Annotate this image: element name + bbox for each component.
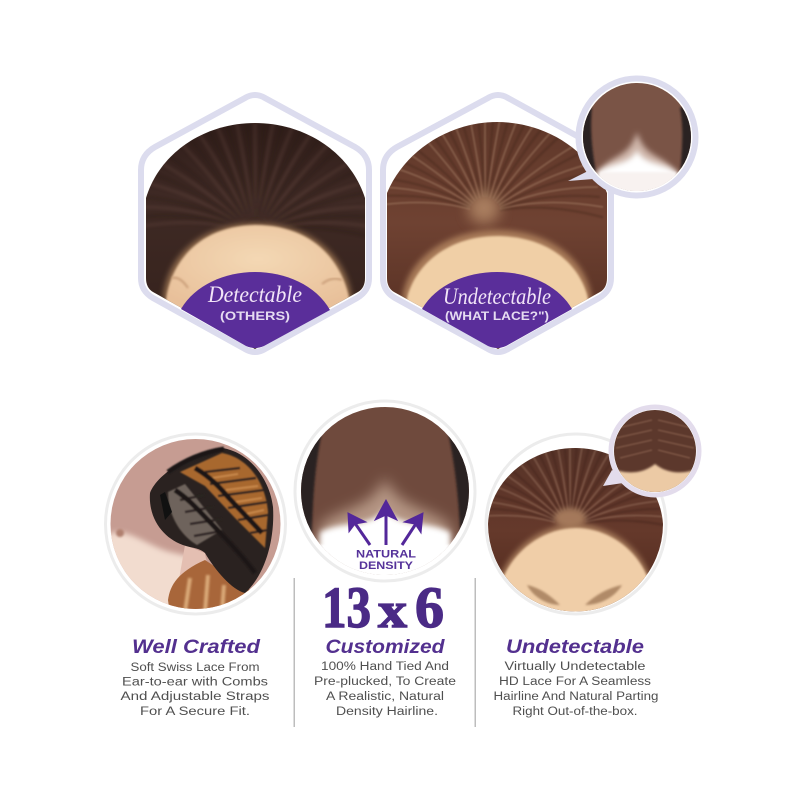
photo: dark hair with visible hairline <box>146 123 365 349</box>
badge: undetectable <box>422 272 572 348</box>
badge: detectable <box>181 272 330 348</box>
callout inset: natural parting close-up <box>603 407 700 495</box>
body text: well crafted: Ear-to-ear with Combs <box>122 676 268 688</box>
label: natural density <box>356 548 416 572</box>
body text: customized <box>314 661 456 718</box>
body text: undetectable <box>494 661 658 718</box>
big number: 13 x 6: 6 <box>415 575 444 640</box>
panel: 13 x 6 customized <box>295 401 475 718</box>
body text: undetectable: Virtually Undetectable <box>504 661 646 673</box>
body text: well crafted: For A Secure Fit. <box>140 706 250 718</box>
heading: well crafted: Well Crafted <box>132 637 260 658</box>
photo circle: lace cap construction <box>105 434 290 620</box>
badge sub label: (OTHERS) <box>220 309 290 323</box>
big number: 13 x 6: 13 <box>322 575 371 640</box>
icon: density arrows <box>348 500 423 545</box>
hexagon frame <box>141 95 369 352</box>
body text: well crafted: And Adjustable Straps <box>120 691 270 703</box>
body text: customized: Density Hairline. <box>336 706 438 718</box>
panel: undetectable hairline hexagon <box>367 78 696 355</box>
photo circle: parted hairline <box>484 432 668 616</box>
panel: detectable hairline hexagon <box>137 95 383 355</box>
big number: 13 x 6: x <box>378 582 407 638</box>
body text: customized: 100% Hand Tied And <box>321 661 449 673</box>
photo: auburn hair with natural hairline <box>387 122 607 349</box>
hexagon frame <box>383 95 611 352</box>
body text: undetectable: Right Out-of-the-box. <box>512 706 638 718</box>
badge script label: Detectable <box>207 282 302 307</box>
panel: well crafted <box>105 434 290 718</box>
badge sub label: (WHAT LACE?") <box>445 309 549 323</box>
big number: 13 x 6 <box>322 575 444 640</box>
photo circle: natural density hairline <box>295 401 475 590</box>
body text: customized: A Realistic, Natural <box>326 691 444 703</box>
body text: undetectable: HD Lace For A Seamless <box>499 676 651 688</box>
body text: customized: Pre-plucked, To Create <box>314 676 456 688</box>
heading: customized: Customized <box>326 637 445 658</box>
body text: well crafted: Soft Swiss Lace From <box>130 662 260 674</box>
label: natural density: NATURAL <box>356 548 416 560</box>
badge script label: Undetectable <box>443 284 551 309</box>
body text: well crafted <box>120 662 270 718</box>
body text: undetectable: Hairline And Natural Parting <box>494 691 658 703</box>
callout inset: hairline close-up <box>568 78 696 196</box>
panel: undetectable <box>484 404 702 718</box>
divider right <box>474 578 476 727</box>
label: natural density: DENSITY <box>359 560 414 572</box>
divider left <box>294 578 295 727</box>
heading: undetectable: Undetectable <box>506 637 644 658</box>
